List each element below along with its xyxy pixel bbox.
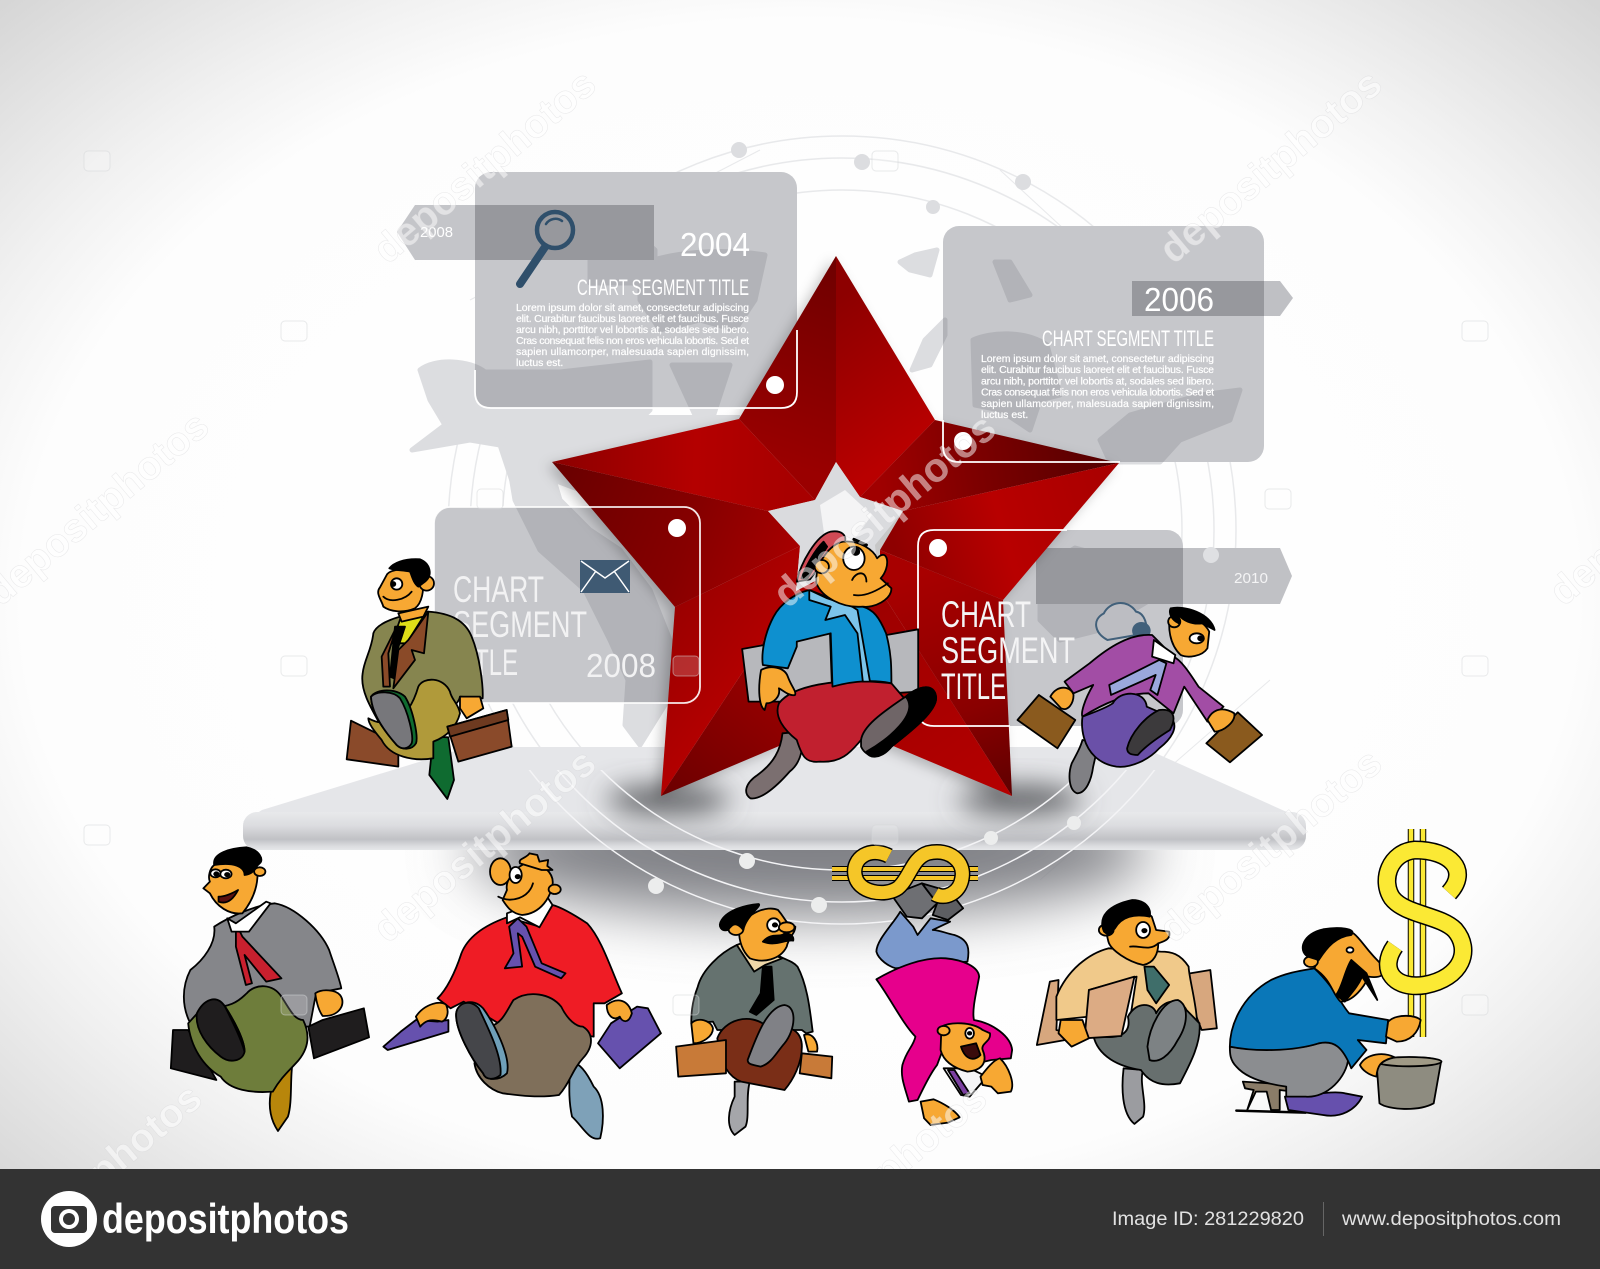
footer logo: depositphotos [102, 1195, 349, 1242]
card 2006 text: 2006 [1144, 281, 1214, 318]
ribbon: 2010 [1036, 547, 1292, 604]
figure: small man with moustache [676, 904, 832, 1135]
icon: envelope [580, 560, 630, 593]
map seen through cards [475, 246, 1242, 702]
figure: man in beige shirt with folders [1037, 900, 1217, 1124]
card 2004 text: elit. Curabitur faucibus laoreet elit et faucibus. Fusce [516, 313, 749, 325]
icon: cloud [1096, 603, 1151, 640]
card 2010 text: CHART [941, 594, 1031, 635]
star shadows on platform [547, 260, 1114, 814]
card 2010 text [941, 570, 1268, 707]
ribbon: 2006 [1132, 281, 1293, 316]
card 2004 text: 2004 [680, 226, 750, 263]
card 2008 text: TITLE [453, 642, 518, 683]
card 2006 text: sapien ullamcorper, malesuada sapien dignissim, [981, 398, 1214, 410]
footer bar [0, 1169, 1600, 1269]
card 2006 text: arcu nibh, porttitor vel lobortis at, sodales sed libero. [981, 376, 1214, 388]
concentric network rings [430, 136, 1270, 924]
figure: man planting dollar in bucket [1230, 829, 1463, 1116]
card 2010 text: TITLE [941, 666, 1006, 707]
card outlines [434, 330, 1120, 726]
red star [552, 256, 1119, 796]
card fills [434, 172, 1264, 726]
card 2004 text: arcu nibh, porttitor vel lobortis at, sodales sed libero. [516, 324, 749, 336]
watermarks: depositphotos [1151, 740, 1390, 951]
figure: man in red sweater [383, 853, 661, 1139]
card 2008 text: SEGMENT [453, 604, 587, 645]
card dots [668, 376, 972, 557]
world map [412, 239, 1240, 745]
card 2008 text [453, 569, 656, 684]
card 2008 text: CHART [453, 569, 544, 610]
figure: man in purple sweater [1017, 608, 1262, 793]
watermarks: depositphotos [1151, 61, 1390, 272]
watermarks: depositphotos [365, 61, 604, 272]
icon: magnifying glass [520, 212, 573, 284]
card 2010 text: SEGMENT [941, 630, 1075, 671]
card 2004 text: Lorem ipsum dolor sit amet, consectetur adipiscing [516, 302, 749, 314]
card 2004 text: sapien ullamcorper, malesuada sapien dignissim, [516, 346, 749, 358]
lower ring arcs over platform [528, 770, 1156, 925]
figure: man in grey sweater [171, 847, 369, 1131]
watermark camera marks [84, 151, 1488, 1015]
card 2006 text: Cras consequat felis non eros vehicula lobortis. Sed et [981, 386, 1214, 398]
figure: upside-down man with dollar [832, 852, 1012, 1125]
footer bar: www.depositphotos.com [1341, 1208, 1561, 1230]
platform [243, 747, 1306, 850]
card 2008 text: 2008 [586, 647, 656, 684]
card 2004 text: Cras consequat felis non eros vehicula lobortis. Sed et [516, 335, 749, 347]
card 2006 text: luctus est. [981, 409, 1028, 421]
card 2004 text: CHART SEGMENT TITLE [577, 275, 749, 300]
figure: man in blue jacket with red cap [742, 531, 936, 798]
card 2006 text [981, 281, 1214, 421]
shadow under platform [442, 850, 1178, 958]
ribbon: 2008 [397, 205, 654, 260]
watermarks: depositphotos [365, 740, 604, 951]
card 2006 text: elit. Curabitur faucibus laoreet elit et faucibus. Fusce [981, 364, 1214, 376]
card 2006 text: CHART SEGMENT TITLE [1042, 326, 1214, 351]
card 2004 text: 2008 [420, 224, 453, 241]
card 2004 text [420, 224, 750, 369]
card 2006 text: Lorem ipsum dolor sit amet, consectetur adipiscing [981, 353, 1214, 365]
card 2004 text: luctus est. [516, 357, 563, 369]
footer bar: Image ID: 281229820 [1112, 1208, 1304, 1230]
card 2010 text: 2010 [1234, 570, 1268, 587]
footer logo [41, 1191, 349, 1247]
watermarks: depositphotos [765, 405, 1004, 616]
figure: man in olive suit [347, 559, 512, 799]
